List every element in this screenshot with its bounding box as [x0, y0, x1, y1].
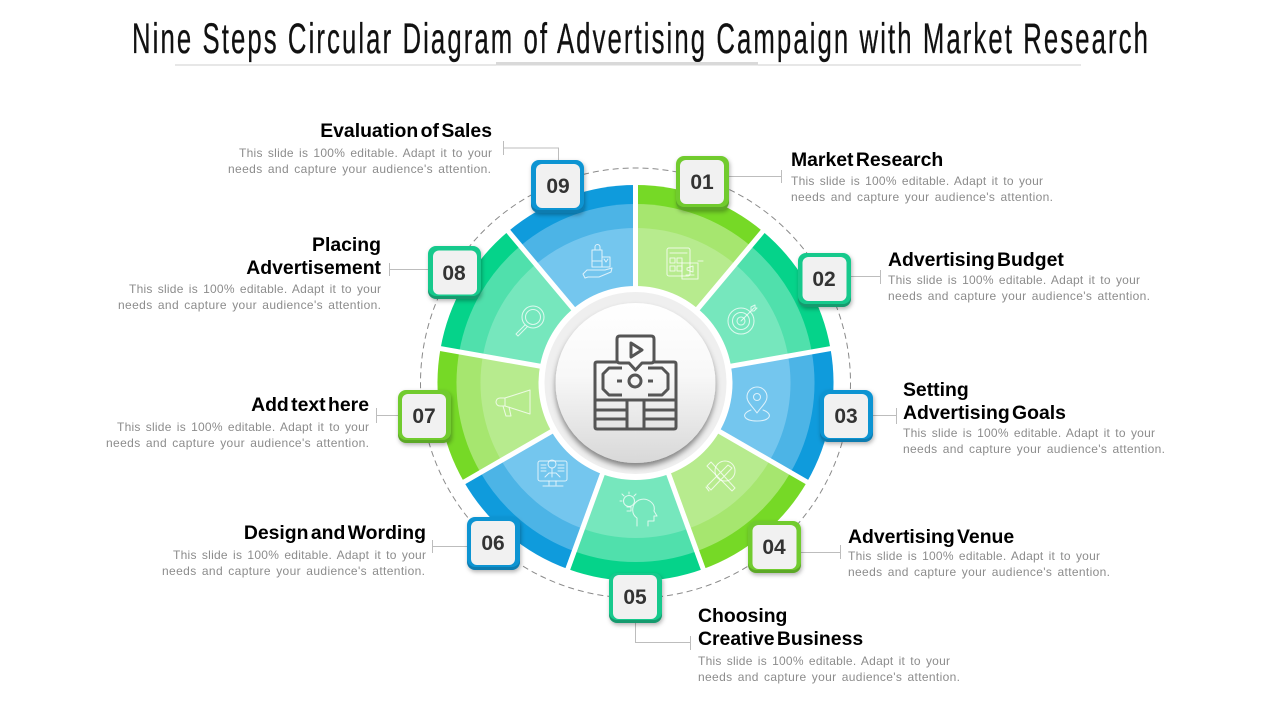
connector: 03: [872, 408, 896, 424]
text block: Market Research: [791, 149, 1053, 204]
text block: Placing Advertisement: Placing: [312, 234, 381, 256]
text block: Advertising Venue: This slide is 100% editable. Adapt it to your: [848, 549, 1100, 563]
text block: Setting Advertising Goals: [903, 379, 1165, 456]
badge 09: [531, 160, 584, 213]
connector: 09: [504, 141, 558, 162]
text block: Advertising Budget: This slide is 100% editable. Adapt it to your: [888, 273, 1140, 287]
text block: Choosing Creative Business: [698, 605, 960, 684]
wedge 08: [441, 223, 658, 383]
badge 05: [609, 573, 662, 623]
badge 01: [676, 156, 729, 210]
text block: Placing Advertisement: This slide is 100% editable. Adapt it to your: [129, 282, 381, 296]
centre hub: [538, 286, 732, 480]
badge 07: 07: [412, 405, 436, 428]
text block: Add text here: needs and capture your audience's attention.: [106, 436, 369, 450]
text block: Setting Advertising Goals: Advertising Goals: [903, 402, 1066, 424]
text block: Evaluation of Sales: This slide is 100% editable. Adapt it to your: [239, 146, 492, 160]
text block: Add text here: [106, 394, 369, 450]
text block: Advertising Budget: [888, 249, 1150, 303]
badge 04: 04: [762, 536, 786, 559]
badge 03: [820, 390, 873, 442]
wedge 01: [636, 185, 763, 383]
text block: Choosing Creative Business: needs and capture your audience's attention.: [698, 670, 960, 684]
connector: 05: [636, 620, 690, 650]
wedge 09: [508, 150, 733, 383]
text block: Market Research: needs and capture your audience's attention.: [791, 190, 1053, 204]
icon: head with bulb: [620, 492, 657, 526]
text block: Design and Wording: Design and Wording: [244, 522, 426, 544]
text block: Design and Wording: This slide is 100% editable. Adapt it to your: [173, 548, 426, 562]
text block: Evaluation of Sales: [228, 120, 492, 176]
text block: Add text here: Add text here: [251, 394, 369, 416]
icon: monitor with network: [538, 460, 567, 486]
connector: 01: [727, 170, 782, 183]
text block: Advertising Venue: [848, 526, 1110, 579]
text block: Placing Advertisement: Advertisement: [246, 257, 382, 279]
text block: Setting Advertising Goals: Setting: [903, 379, 969, 401]
circular diagram wedges: [400, 150, 860, 613]
text block: Evaluation of Sales: Evaluation of Sales: [320, 120, 492, 142]
badge 08: 08: [442, 262, 466, 285]
text block: Choosing Creative Business: Choosing: [698, 605, 787, 627]
wedge 05: [516, 383, 703, 613]
text block: Market Research: This slide is 100% editable. Adapt it to your: [791, 174, 1043, 188]
connector: 06: [432, 540, 468, 553]
icon: megaphone: [496, 390, 530, 416]
wedge 06: [448, 339, 636, 569]
text block: Advertising Venue: Advertising Venue: [848, 526, 1014, 548]
text block: Placing Advertisement: needs and capture your audience's attention.: [118, 298, 381, 312]
text block: Placing Advertisement: [118, 234, 382, 312]
badge 04: [748, 521, 801, 573]
icon: target: [728, 305, 757, 334]
icon: magnifier: [516, 306, 544, 336]
wedge 07: [400, 273, 636, 482]
text block: Advertising Venue: needs and capture your audience's attention.: [848, 565, 1110, 579]
connector: 02: [850, 270, 880, 284]
icon: calculator and document: [667, 248, 703, 279]
badge 06: 06: [481, 532, 505, 555]
icon: money and video bubble: [595, 336, 676, 429]
badge 03: 03: [834, 405, 858, 428]
badge 09: 09: [546, 175, 570, 198]
text block: Choosing Creative Business: This slide is 100% editable. Adapt it to your: [698, 654, 950, 668]
badge 05: 05: [623, 586, 647, 609]
text block: Design and Wording: [162, 522, 426, 578]
connector: 07: [376, 408, 400, 423]
badge 01: 01: [690, 171, 714, 194]
text block: Setting Advertising Goals: needs and capture your audience's attention.: [903, 442, 1165, 456]
dashed outer ring: [420, 168, 850, 598]
text block: Add text here: This slide is 100% editable. Adapt it to your: [117, 420, 369, 434]
icon: hand holding shopping bags: [583, 244, 612, 278]
text block: Advertising Budget: Advertising Budget: [888, 249, 1064, 271]
icon: pencil and ruler: [706, 461, 735, 491]
badge 02: 02: [812, 268, 836, 291]
wedge 04: [572, 383, 807, 592]
title underline: [175, 62, 1081, 66]
wedge 02: [636, 231, 860, 465]
text block: Advertising Budget: needs and capture your audience's attention.: [888, 289, 1150, 303]
badge 07: [398, 390, 451, 443]
text block: Design and Wording: needs and capture your audience's attention.: [162, 564, 425, 578]
badge 02: [798, 253, 851, 307]
icon: map pin: [745, 387, 769, 421]
badge 08: [428, 246, 481, 299]
text block: Market Research: Market Research: [791, 149, 943, 171]
text block: Setting Advertising Goals: This slide is 100% editable. Adapt it to your: [903, 426, 1155, 440]
badge 06: [467, 517, 520, 570]
text block: Choosing Creative Business: Creative Business: [698, 628, 863, 650]
connector: 08: [390, 263, 430, 276]
connector: 04: [800, 545, 840, 559]
wedge 03: [636, 349, 853, 508]
text block: Evaluation of Sales: needs and capture your audience's attention.: [228, 162, 491, 176]
